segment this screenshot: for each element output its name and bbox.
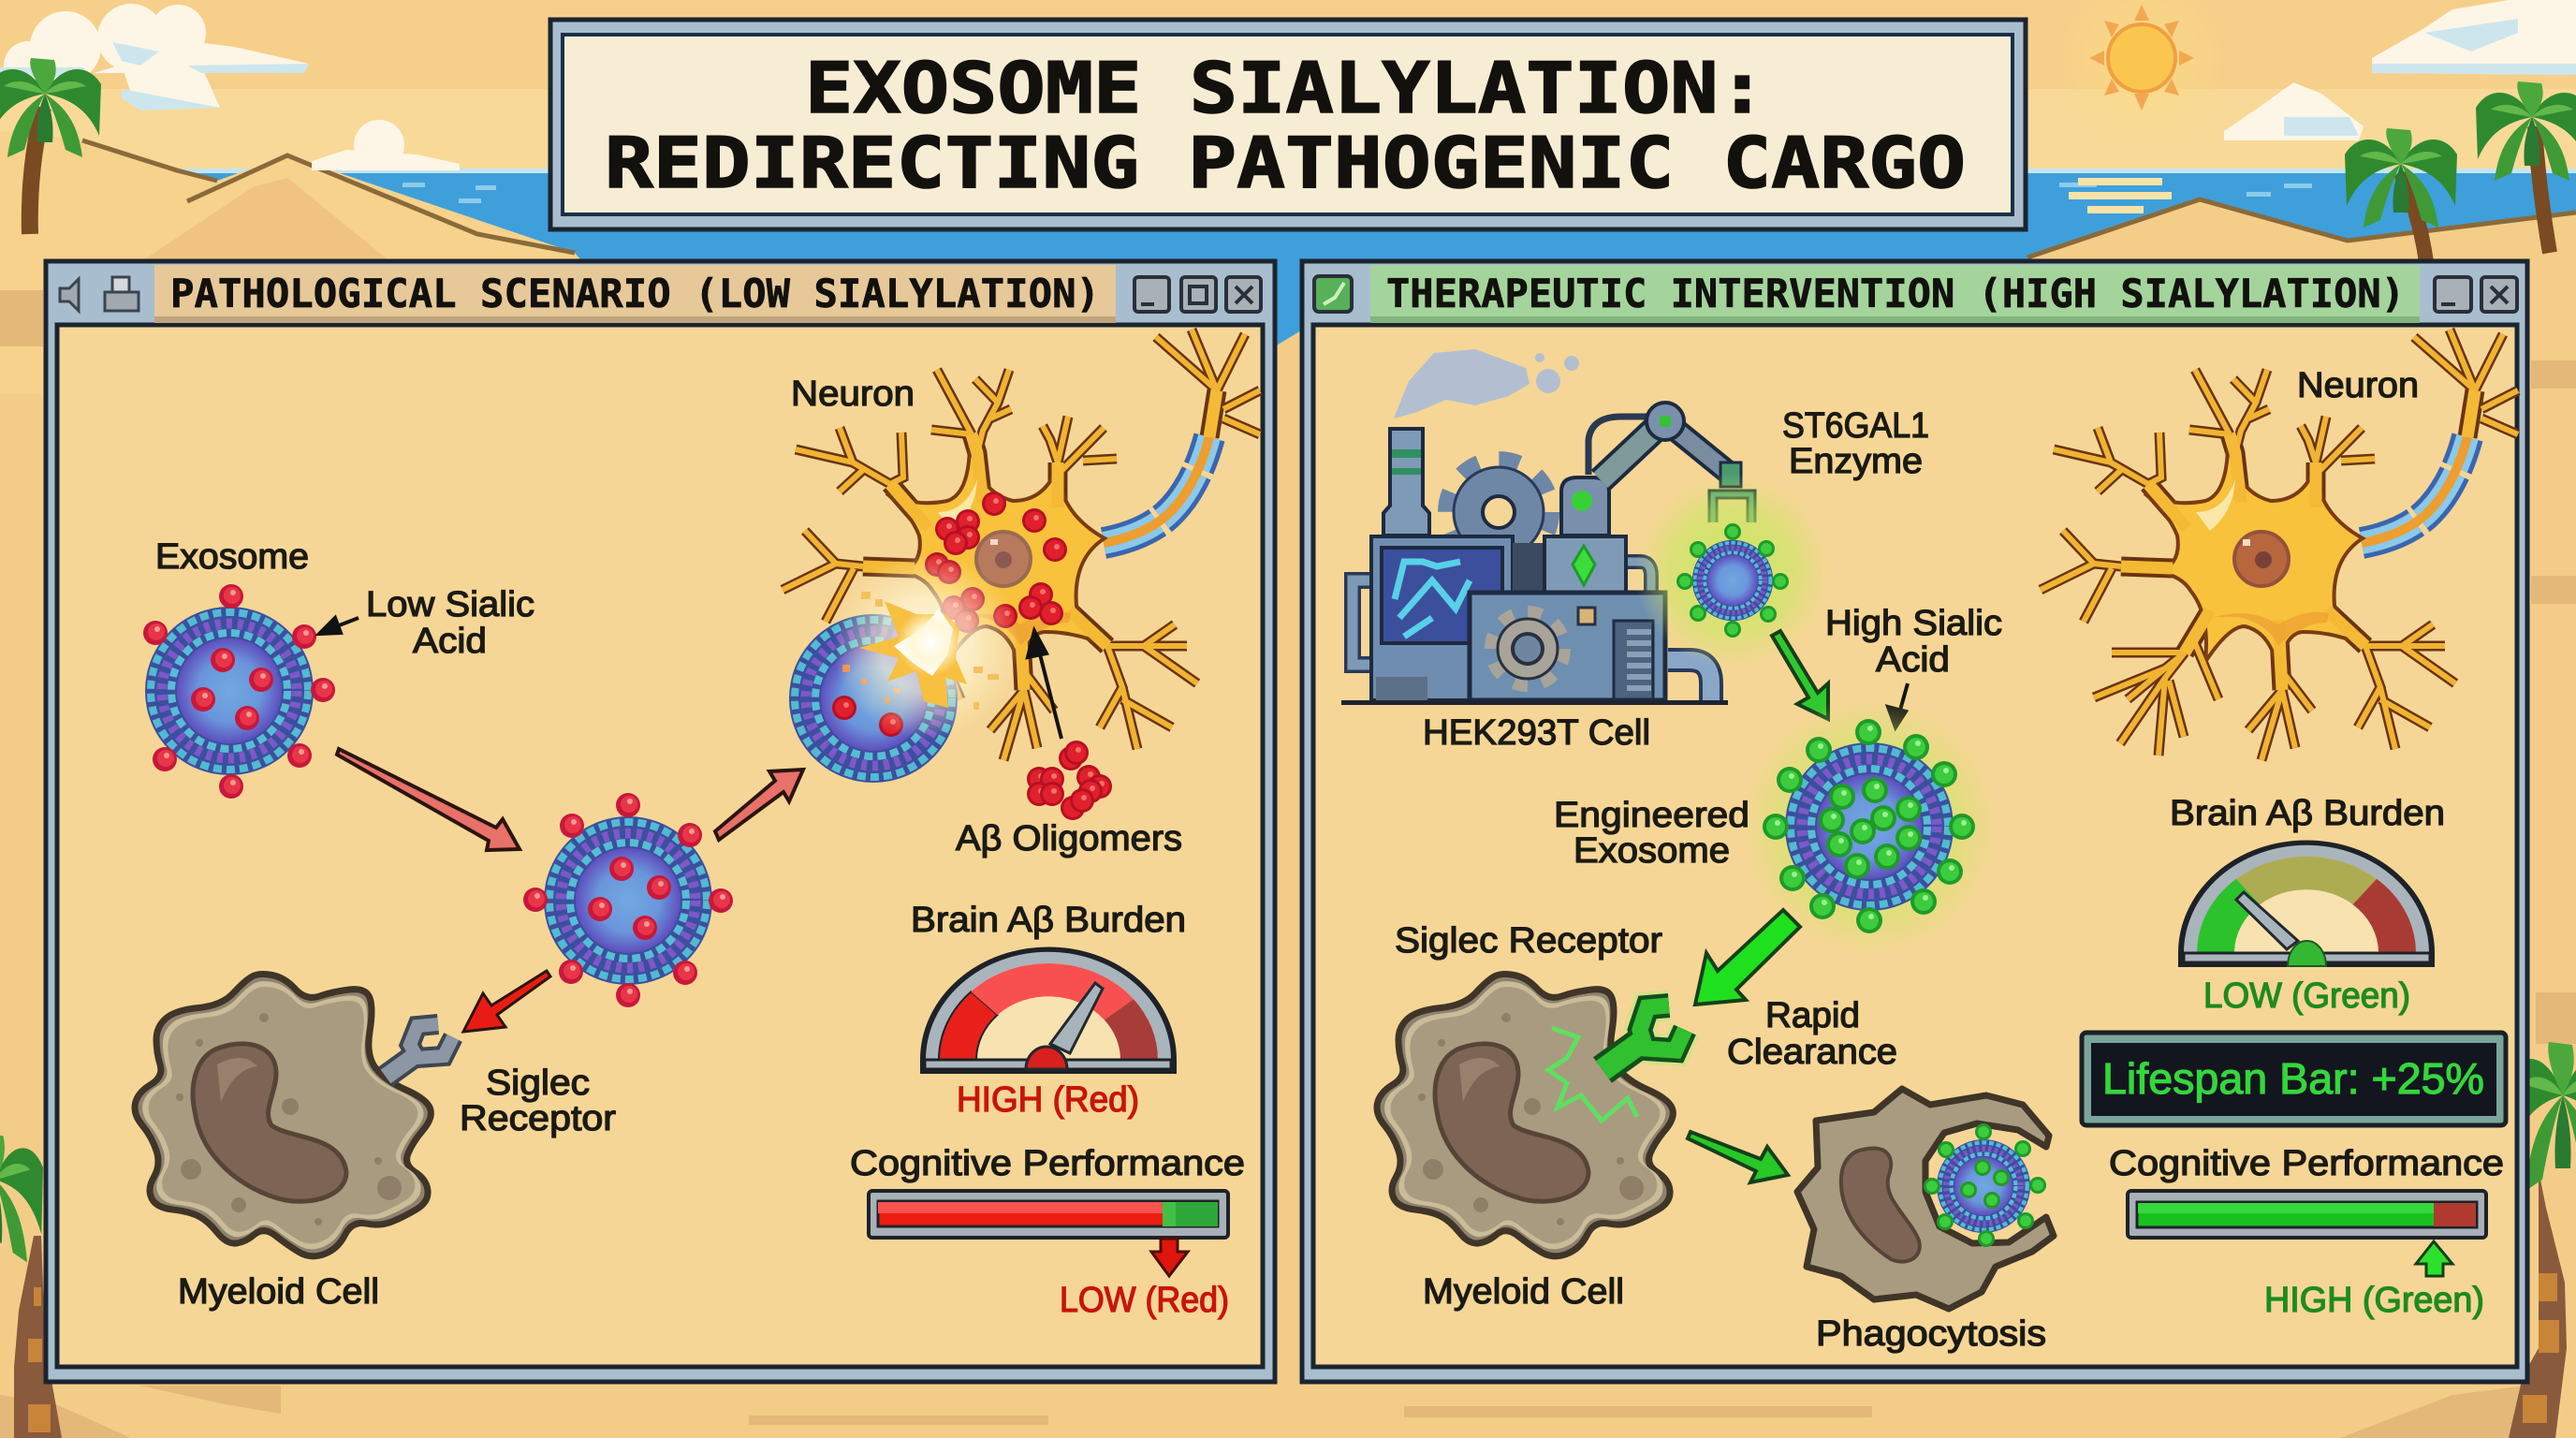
label: ST6GAL1 Enzyme: Enzyme xyxy=(1789,442,1923,481)
gauge reading: HIGH (Red): HIGH (Red) xyxy=(957,1080,1139,1120)
ground line xyxy=(1341,700,1728,705)
label: Low Sialic Acid: Low Sialic xyxy=(366,585,534,624)
label: High Sialic Acid: Acid xyxy=(1876,640,1950,680)
label: Siglec Receptor xyxy=(460,1064,616,1138)
reading: HIGH (Green): HIGH (Green) xyxy=(2264,1281,2484,1320)
chimney xyxy=(1383,429,1429,536)
bar: cognitive performance high xyxy=(2128,1191,2486,1238)
arrow: factory to engineered exosome xyxy=(1772,631,1828,719)
label: ST6GAL1 Enzyme: ST6GAL1 xyxy=(1782,406,1929,446)
arrow: exosome to exosome xyxy=(337,749,520,850)
label: Rapid Clearance: Rapid xyxy=(1765,996,1860,1035)
left panel title bar: PATHOLOGICAL SCENARIO (LOW SIALYLATION) xyxy=(170,271,1100,316)
label: Engineered Exosome: Exosome xyxy=(1573,831,1730,871)
gauge: brain Aβ burden low xyxy=(2181,843,2432,966)
right panel title bar: THERAPEUTIC INTERVENTION (HIGH SIALYLATION) xyxy=(1386,271,2405,316)
icons: speaker and printer xyxy=(60,277,139,311)
panel: pathological scenario xyxy=(46,261,1275,1382)
gauge reading: LOW (Green): LOW (Green) xyxy=(2203,976,2410,1016)
label: Low Sialic Acid: Acid xyxy=(413,622,487,661)
reading: LOW (Red): LOW (Red) xyxy=(1060,1281,1229,1320)
arrow: to phagocytosis xyxy=(1688,1132,1788,1182)
label: High Sialic Acid: High Sialic xyxy=(1825,604,2002,643)
flash of fusion xyxy=(833,552,1020,740)
arrow: performance rise xyxy=(2416,1241,2452,1276)
label: Rapid Clearance: Clearance xyxy=(1727,1033,1897,1072)
callout: lifespan bar xyxy=(2082,1033,2506,1125)
arrow: exosome to siglec receptor xyxy=(463,971,550,1032)
window controls xyxy=(1134,277,1261,312)
title panel xyxy=(550,20,2026,229)
label: Cognitive Performance: Cognitive Performance xyxy=(2109,1144,2504,1183)
title text line 1: EXOSOME SIALYLATION: xyxy=(805,47,1766,129)
arrow: performance drop xyxy=(1151,1239,1188,1276)
exosome fusing with neuron xyxy=(789,552,1020,783)
label: Siglec Receptor: Siglec Receptor xyxy=(1395,921,1662,961)
label: Rapid Clearance xyxy=(1727,996,1897,1072)
spark: receptor activation xyxy=(1548,1028,1637,1121)
label: Aβ Oligomers: Aβ Oligomers xyxy=(956,819,1182,858)
monitor housing xyxy=(1371,536,1544,700)
icon: sun xyxy=(2048,0,2235,152)
exosome with low sialic acid xyxy=(143,584,335,799)
gauge: brain Aβ burden high xyxy=(923,949,1174,1071)
myeloid cell xyxy=(135,975,453,1256)
label: ST6GAL1 Enzyme xyxy=(1782,406,1929,481)
label: Cognitive Performance: Cognitive Performance xyxy=(850,1144,1245,1183)
label: Phagocytosis: Phagocytosis xyxy=(1816,1314,2046,1354)
label: High Sialic Acid xyxy=(1825,604,2002,680)
callout: lifespan bar: Lifespan Bar: +25% xyxy=(2102,1054,2484,1103)
label: Siglec Receptor: Receptor xyxy=(460,1099,616,1138)
label: HEK293T Cell: HEK293T Cell xyxy=(1423,713,1650,753)
label: Neuron: Neuron xyxy=(791,374,915,414)
connecting pipes xyxy=(1353,562,1711,700)
exosome in circulation xyxy=(523,793,733,1007)
myeloid cell with activated receptor xyxy=(1377,975,1685,1256)
neuron: pathological with Aβ aggregates xyxy=(783,330,1260,760)
exosome being sialylated xyxy=(1634,473,1831,669)
arrow: rapid binding to receptor xyxy=(1695,910,1800,1005)
bar: cognitive performance low xyxy=(869,1191,1228,1238)
label: Engineered Exosome: Engineered xyxy=(1554,796,1749,835)
label: Neuron: Neuron xyxy=(2297,366,2419,405)
label: Brain Aβ Burden: Brain Aβ Burden xyxy=(911,901,1186,940)
window controls xyxy=(2435,277,2517,312)
label: Brain Aβ Burden: Brain Aβ Burden xyxy=(2170,794,2445,833)
label: Siglec Receptor: Siglec xyxy=(486,1064,590,1103)
front machine xyxy=(1470,593,1665,700)
icon: green siglec wrench xyxy=(1603,1005,1685,1070)
engineered exosome with high sialic acid xyxy=(1738,696,2000,958)
label: Engineered Exosome xyxy=(1554,796,1749,871)
label: Low Sialic Acid xyxy=(366,585,534,661)
factory: HEK293T cell xyxy=(1341,349,1751,705)
arrow: low sialic acid pointer xyxy=(319,618,359,634)
arrow: high sialic acid pointer xyxy=(1888,683,1908,727)
neuron: healthy xyxy=(2041,330,2518,760)
Aβ oligomers xyxy=(1027,741,1112,820)
label: Exosome: Exosome xyxy=(155,537,309,577)
label: Myeloid Cell: Myeloid Cell xyxy=(178,1272,379,1312)
smoke xyxy=(1394,349,1579,418)
icon: green check button xyxy=(1314,276,1352,312)
big gear xyxy=(1446,460,1551,565)
title text line 2: REDIRECTING PATHOGENIC CARGO xyxy=(605,122,1966,204)
icon: siglec receptor wrench xyxy=(386,1024,453,1077)
arrow: exosome to neuron xyxy=(715,770,803,840)
arrow: oligomers to neuron xyxy=(1028,631,1061,739)
clouds xyxy=(0,0,2576,170)
robot arm xyxy=(1561,403,1751,536)
control box with green light xyxy=(1544,536,1626,594)
label: Myeloid Cell: Myeloid Cell xyxy=(1423,1272,1624,1312)
panel: therapeutic intervention xyxy=(1302,261,2527,1382)
Aβ aggregates inside neuron xyxy=(925,492,1067,633)
phagocytosis cell engulfing exosome xyxy=(1797,1089,2054,1309)
nucleus xyxy=(976,532,1031,586)
